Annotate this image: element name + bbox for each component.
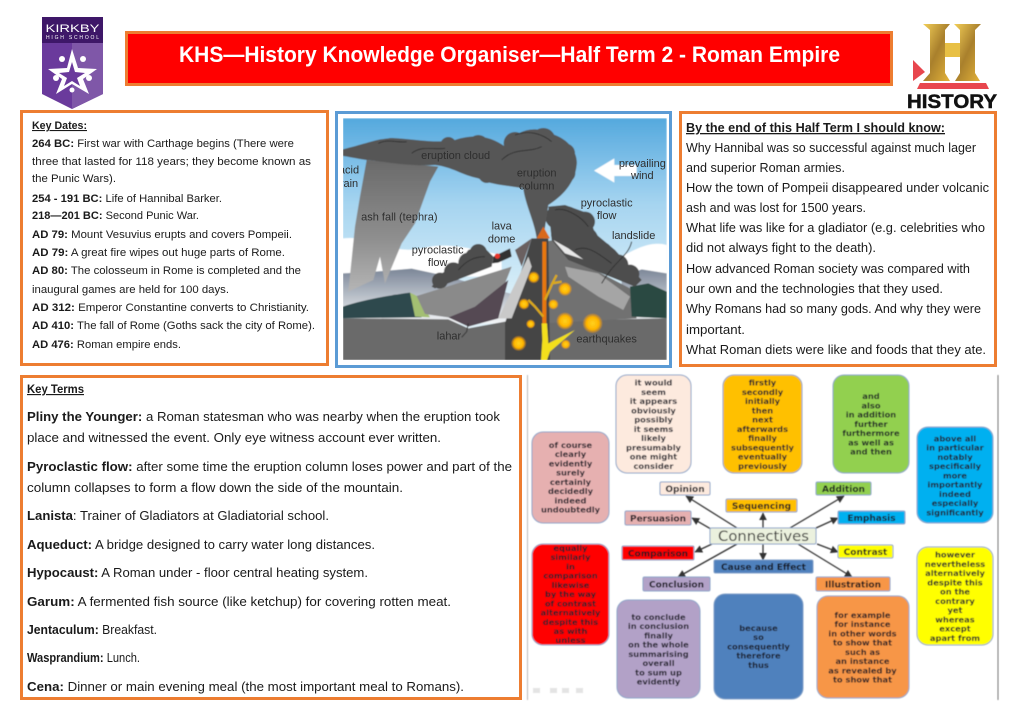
word box: conclusion: finally xyxy=(644,630,673,640)
word box: contrast: yet xyxy=(947,605,963,615)
logo: History channel xyxy=(907,24,997,113)
word box: comparison: likewise xyxy=(552,580,590,590)
volcano labels: lava xyxy=(492,221,513,233)
panel: key dates: 218—201 BC: Second Punic War. xyxy=(32,210,199,222)
panel: learning goals xyxy=(680,112,996,366)
word box: illustration: an instance xyxy=(835,656,890,666)
volcano labels: earthquakes xyxy=(576,333,637,345)
logo: Kirkby High School shield: KIRKBY xyxy=(46,23,100,35)
panel: key terms: Cena: Dinner or main evening meal (the most important meal to Romans). xyxy=(27,679,464,694)
panel: key dates: 264 BC: First war with Carthage begins (There were xyxy=(32,138,294,150)
volcano labels xyxy=(339,150,666,345)
word box: illustration xyxy=(817,596,909,698)
word box: persuasion: indeed xyxy=(555,496,586,506)
word box: emphasis xyxy=(917,427,993,523)
word box: sequencing: afterwards xyxy=(737,424,788,434)
panel: learning goals: By the end of this Half Term I should know: xyxy=(686,120,945,135)
word box: comparison: comparison xyxy=(543,570,598,580)
category labels: Opinion xyxy=(665,485,705,495)
word box: contrast: except xyxy=(939,624,971,634)
volcano labels: landslide xyxy=(612,230,655,242)
word box: addition: and then xyxy=(850,446,892,456)
word box: addition: furthermore xyxy=(842,428,900,438)
word box: comparison: of contrast xyxy=(545,598,596,608)
panel: learning goals: What life was like for a gladiator (e.g. celebrities who xyxy=(686,220,985,235)
logo: History channel: HISTORY xyxy=(907,92,997,113)
word box: emphasis: significantly xyxy=(926,508,984,518)
panel: key terms: Pyroclastic flow: after some time the eruption column loses power and part of the xyxy=(27,459,512,474)
panel: learning goals: ash and was lost for 1500 years. xyxy=(686,200,866,215)
word box: contrast: nevertheless xyxy=(925,559,985,569)
volcano labels: pyroclastic xyxy=(412,245,464,257)
panel: learning goals: our own and the technologies that they used. xyxy=(686,281,943,296)
word box: addition: as well as xyxy=(848,438,894,448)
panel: volcano diagram xyxy=(336,112,670,366)
category labels: Cause and Effect xyxy=(721,563,807,573)
word box: contrast: alternatively xyxy=(925,568,985,578)
volcano labels: rain xyxy=(340,178,358,190)
panel: key dates: AD 79: Mount Vesuvius erupts and covers Pompeii. xyxy=(32,229,292,241)
word box: conclusion: evidently xyxy=(637,676,681,686)
word box: contrast xyxy=(917,547,993,645)
word box: cause and effect: thus xyxy=(748,660,769,670)
panel: learning goals: How advanced Roman society was compared with xyxy=(686,261,970,276)
word box: contrast: apart from xyxy=(930,633,980,643)
word box: opinion: obviously xyxy=(631,406,676,416)
volcano labels: flow xyxy=(428,257,447,269)
word box: emphasis: specifically xyxy=(929,461,982,471)
panel: key terms: Lanista: Trainer of Gladiators at Gladiatorial school. xyxy=(27,508,329,523)
word box: sequencing: initially xyxy=(745,396,781,406)
word box: persuasion: decidedly xyxy=(548,486,594,496)
panel: key terms: Hypocaust: A Roman under - floor central heating system. xyxy=(27,565,368,580)
word box: addition: further xyxy=(854,419,889,429)
word box: emphasis: more xyxy=(943,470,967,480)
word box: persuasion: undoubtedly xyxy=(541,504,601,514)
word box: illustration: in other words xyxy=(828,628,897,638)
category labels: Addition xyxy=(822,485,865,495)
volcano labels: prevailing xyxy=(619,158,666,170)
word box: sequencing: firstly xyxy=(749,378,777,388)
word box: sequencing: then xyxy=(752,406,773,416)
panel: key terms: Key Terms xyxy=(27,384,84,396)
panel: key dates: AD 79: A great fire wipes out huge parts of Rome. xyxy=(32,247,285,259)
word box: illustration: as revealed by xyxy=(828,666,897,676)
panel: key dates: the Punic Wars). xyxy=(32,173,116,185)
volcano labels: dome xyxy=(488,233,515,245)
word box: contrast: on the xyxy=(940,586,970,596)
panel: learning goals: Why Romans had so many gods. And why they were xyxy=(686,301,981,316)
volcano labels: flow xyxy=(597,210,616,222)
word box: sequencing: eventually xyxy=(738,452,788,462)
word box: comparison: equally xyxy=(553,543,588,553)
word box: comparison xyxy=(532,543,609,645)
word box: opinion xyxy=(616,375,691,473)
category labels xyxy=(622,482,905,591)
word box: contrast: despite this xyxy=(927,578,983,588)
word box: addition: and xyxy=(862,391,880,401)
word box: conclusion: summarising xyxy=(628,649,689,659)
panel: key terms: Aqueduct: A bridge designed to carry water long distances. xyxy=(27,537,375,552)
arrows xyxy=(678,496,852,577)
word box: emphasis: notably xyxy=(937,452,973,462)
word box: illustration: for instance xyxy=(834,619,891,629)
word box: illustration: to show that xyxy=(833,674,892,684)
word box: addition: in addition xyxy=(846,410,896,420)
panel: learning goals: What Roman diets were like and foods that they ate. xyxy=(686,342,986,357)
panel: connectives mind map xyxy=(528,375,998,700)
panel: key dates: 254 - 191 BC: Life of Hannibal Barker. xyxy=(32,193,222,205)
word box: opinion: likely xyxy=(641,433,667,443)
word box: comparison: similarly xyxy=(550,552,591,562)
panel: learning goals: Why Hannibal was so successful against much lager xyxy=(686,140,977,155)
panel: key dates: inaugural games are held for 100 days. xyxy=(32,284,229,296)
word box: cause and effect: therefore xyxy=(736,650,781,660)
panel: key terms: column collapses to form a flow down the side of the mountain. xyxy=(27,480,403,495)
word box: illustration: such as xyxy=(845,647,880,657)
word box: cause and effect: so xyxy=(753,632,764,642)
category labels: Emphasis xyxy=(847,514,896,524)
panel: learning goals: and superior Roman armies. xyxy=(686,160,845,175)
panel: key dates: three that lasted for 118 years; they become known as xyxy=(32,156,312,168)
word box: contrast: whereas xyxy=(935,614,975,624)
category labels: Contrast xyxy=(844,548,888,558)
title banner xyxy=(126,32,892,84)
panel: key terms: Pliny the Younger: a Roman statesman who was nearby when the eruption took xyxy=(27,409,500,424)
category labels: Persuasion xyxy=(630,514,686,524)
volcano labels: pyroclastic xyxy=(581,197,633,209)
panel: key terms: Wasprandium: Lunch. xyxy=(27,650,140,665)
word box: emphasis: in particular xyxy=(926,442,985,452)
word box: persuasion: surely xyxy=(556,468,585,478)
word box: sequencing: secondly xyxy=(742,387,784,397)
word box: opinion: possibly xyxy=(634,414,673,424)
category labels: Comparison xyxy=(628,550,688,560)
word box: cause and effect: because xyxy=(739,623,778,633)
word box: opinion: seem xyxy=(641,387,666,397)
word box: emphasis: especially xyxy=(932,498,979,508)
word box: illustration: to show that xyxy=(833,638,892,648)
word box: addition: also xyxy=(861,400,881,410)
category labels: Illustration xyxy=(825,580,881,590)
word box: opinion: it appears xyxy=(630,396,677,406)
word box: contrast: however xyxy=(935,550,976,560)
word box: sequencing: previously xyxy=(738,461,787,471)
word box: emphasis: above all xyxy=(934,434,976,444)
word box: comparison: despite this xyxy=(543,617,598,627)
word box: comparison: as with xyxy=(554,626,587,636)
category labels: Conclusion xyxy=(649,580,704,590)
word box: comparison: alternatively xyxy=(541,608,601,618)
word box: comparison: in xyxy=(566,562,575,572)
word box: opinion: consider xyxy=(634,461,674,471)
title banner: KHS—History Knowledge Organiser—Half Term 2 - Roman Empire xyxy=(179,42,840,67)
word box: comparison: unless xyxy=(555,635,586,645)
word box: addition xyxy=(833,375,909,473)
word box: cause and effect: consequently xyxy=(727,642,790,652)
word box: sequencing: finally xyxy=(748,433,777,443)
word box: sequencing: next xyxy=(752,414,773,424)
word box: persuasion: evidently xyxy=(549,458,593,468)
panel: key terms: Jentaculum: Breakfast. xyxy=(27,622,157,637)
volcano labels: wind xyxy=(630,170,654,182)
panel: key dates: AD 410: The fall of Rome (Goths sack the city of Rome). xyxy=(32,320,315,332)
word box: conclusion: in conclusion xyxy=(628,621,689,631)
panel: key dates xyxy=(22,112,328,364)
word box: conclusion xyxy=(617,600,700,698)
panel: learning goals: important. xyxy=(686,322,745,337)
volcano labels: eruption xyxy=(517,168,557,180)
word box: emphasis: indeed xyxy=(939,489,971,499)
word box: persuasion: of course xyxy=(549,440,593,450)
word box: sequencing: subsequently xyxy=(731,442,795,452)
panel: key terms: place and witnessed the event. Only eye witness account ever written. xyxy=(27,430,441,445)
panel: key dates: AD 476: Roman empire ends. xyxy=(32,339,181,351)
panel: key dates: AD 312: Emperor Constantine converts to Christianity. xyxy=(32,302,309,314)
word box: persuasion xyxy=(532,432,609,523)
volcano labels: eruption cloud xyxy=(421,150,490,162)
word box: conclusion: to conclude xyxy=(631,612,686,622)
word box: persuasion: certainly xyxy=(550,477,592,487)
word box: opinion: it would xyxy=(635,378,672,388)
word box: sequencing xyxy=(723,375,802,473)
logo: Kirkby High School shield xyxy=(42,17,103,109)
panel: learning goals: did not always fight to the death). xyxy=(686,240,876,255)
panel: key terms xyxy=(22,376,520,698)
panel: key terms: Garum: A fermented fish source (like ketchup) for covering rotten meat. xyxy=(27,594,451,609)
word box: opinion: presumably xyxy=(626,442,682,452)
word box: opinion: one might xyxy=(630,452,677,462)
category labels: Sequencing xyxy=(732,502,791,512)
central node: connectives: Connectives xyxy=(718,529,809,545)
panel: key dates: Key Dates: xyxy=(32,120,87,132)
word box: contrast: contrary xyxy=(935,596,975,606)
logo: Kirkby High School shield: HIGH SCHOOL xyxy=(46,35,99,41)
word box: conclusion: to sum up xyxy=(635,668,682,678)
word box: conclusion: overall xyxy=(642,658,675,668)
word box: emphasis: importantly xyxy=(928,480,983,490)
volcano labels: ash fall (tephra) xyxy=(361,211,437,223)
word box: cause and effect xyxy=(714,594,803,699)
panel: key dates: AD 80: The colosseum in Rome is completed and the xyxy=(32,265,301,277)
word box: conclusion: on the whole xyxy=(628,640,689,650)
volcano labels: acid xyxy=(339,165,359,177)
panel: learning goals: How the town of Pompeii disappeared under volcanic xyxy=(686,180,989,195)
word box: illustration: for example xyxy=(835,610,891,620)
word box: persuasion: clearly xyxy=(555,449,587,459)
volcano labels: column xyxy=(519,181,554,193)
volcano labels: lahar xyxy=(437,331,462,343)
word box: comparison: by the way xyxy=(545,589,597,599)
word box: opinion: it seems xyxy=(634,424,673,434)
